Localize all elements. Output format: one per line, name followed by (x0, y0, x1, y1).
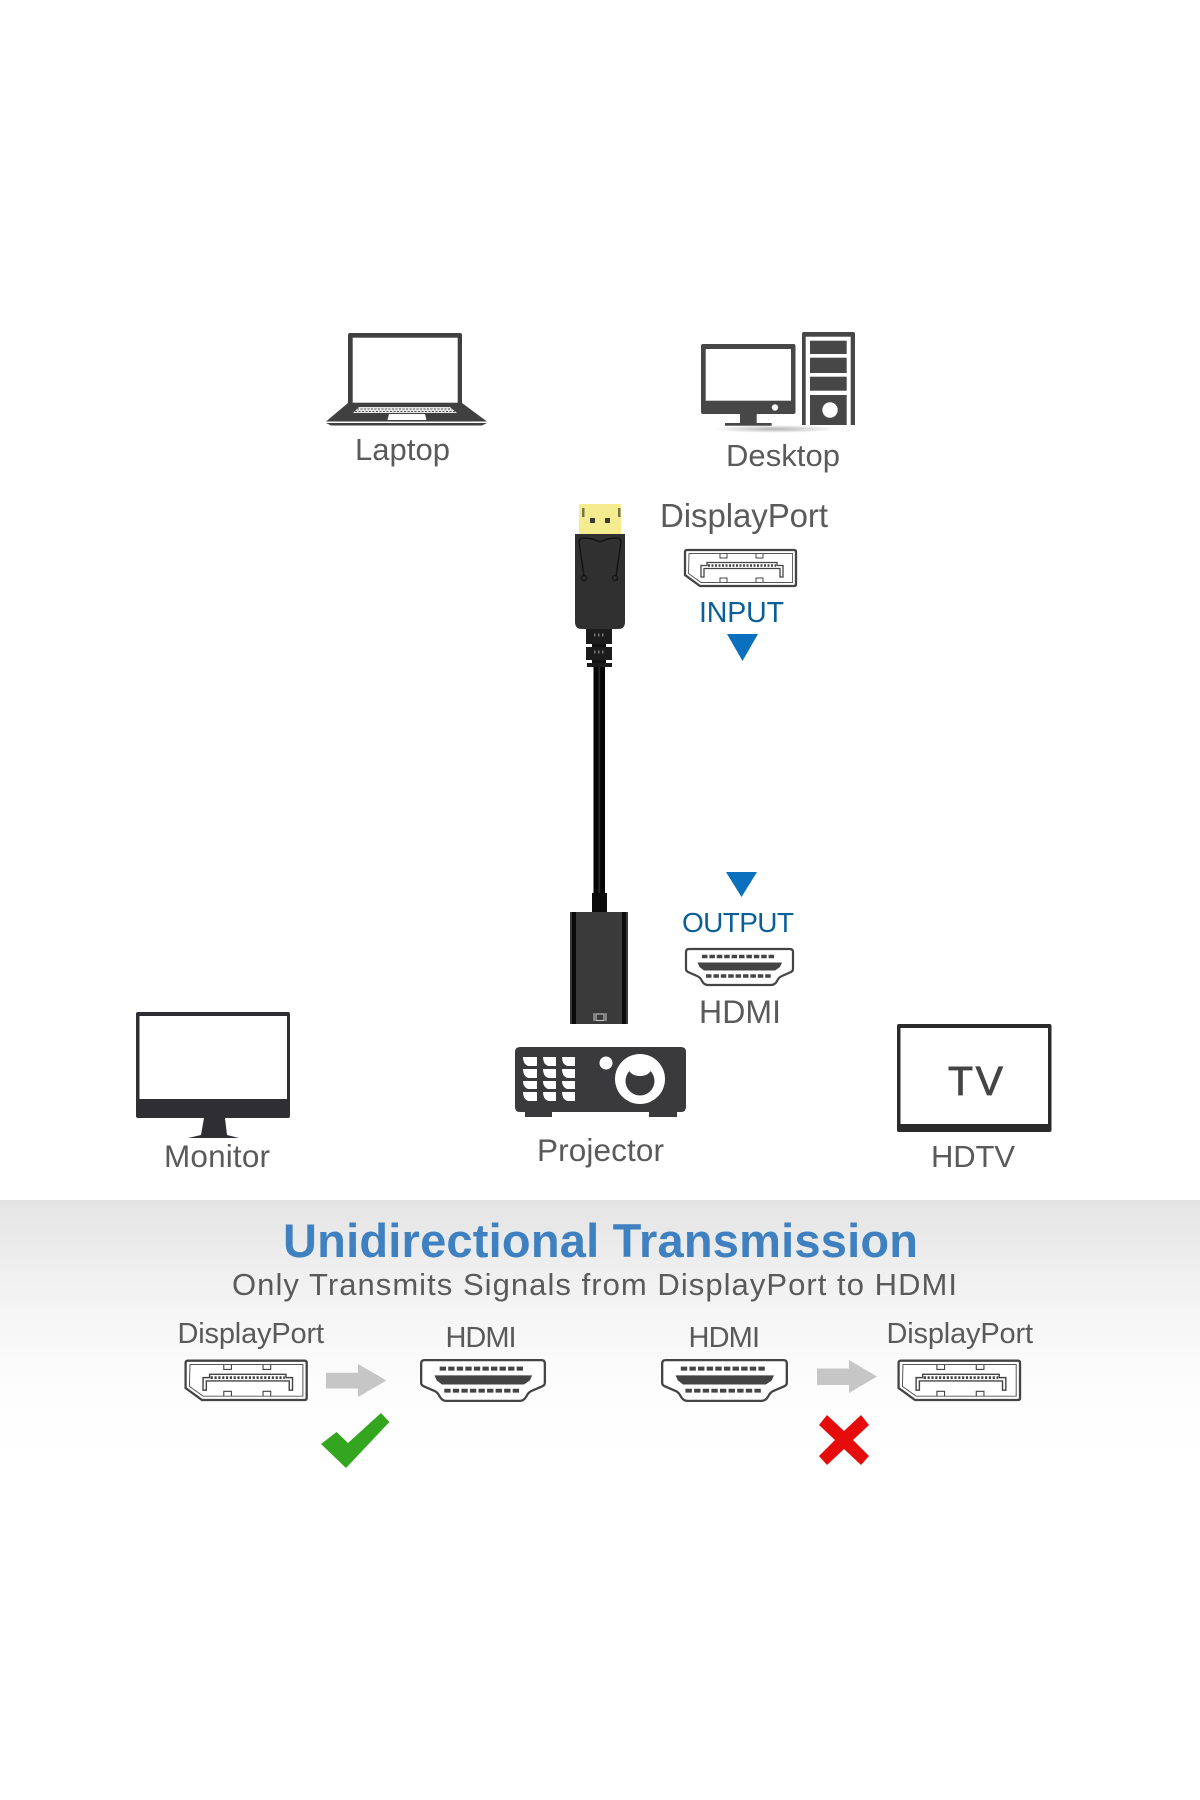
label: OUTPUT: OUTPUT (682, 907, 794, 938)
label: Laptop: Laptop (355, 432, 450, 467)
icon: TV (897, 1024, 1052, 1132)
label: DisplayPort right: DisplayPort (886, 1318, 1033, 1350)
adapter cable (570, 504, 628, 1024)
arrow: left grey (326, 1364, 386, 1397)
DisplayPort plug body (575, 534, 625, 629)
cable (594, 667, 605, 894)
icon: projector (515, 1047, 686, 1117)
icon: HDMI connector (686, 949, 793, 985)
subtitle: Only Transmits Signals from DisplayPort to HDMI (232, 1267, 957, 1302)
icon: monitor (136, 1012, 290, 1138)
label: DisplayPort left: DisplayPort (178, 1318, 324, 1350)
arrow: input triangle (727, 634, 758, 661)
icon: DisplayPort connector right (899, 1361, 1020, 1400)
icon: TV: TV (948, 1058, 1004, 1104)
label: INPUT: INPUT (699, 597, 784, 629)
icon: laptop (326, 333, 487, 426)
title: Unidirectional Transmission (283, 1214, 918, 1267)
label: DisplayPort: DisplayPort (660, 497, 828, 534)
label: HDTV: HDTV (931, 1139, 1015, 1174)
icon: green check (321, 1413, 389, 1468)
label: HDMI: HDMI (699, 994, 781, 1030)
icon: red cross (819, 1415, 869, 1465)
panel: unidirectional transmission (0, 1200, 1200, 1468)
DisplayPort gold plug tip (579, 504, 621, 535)
HDMI adapter housing (570, 912, 628, 1024)
arrow: right grey (817, 1360, 877, 1393)
label: Projector: Projector (537, 1132, 664, 1168)
icon: DisplayPort connector (685, 550, 796, 586)
label: HDMI right: HDMI (688, 1322, 760, 1354)
cable collar (592, 893, 607, 913)
arrow: output triangle (726, 872, 757, 897)
label: Monitor: Monitor (164, 1138, 270, 1174)
label: Desktop: Desktop (726, 438, 840, 473)
label: HDMI left: HDMI (446, 1322, 516, 1354)
icon: HDMI connector right (662, 1360, 787, 1401)
strain relief (586, 629, 612, 667)
icon: HDMI connector left (421, 1360, 545, 1401)
icon: desktop computer (701, 332, 855, 433)
icon: DisplayPort connector left (186, 1361, 307, 1400)
